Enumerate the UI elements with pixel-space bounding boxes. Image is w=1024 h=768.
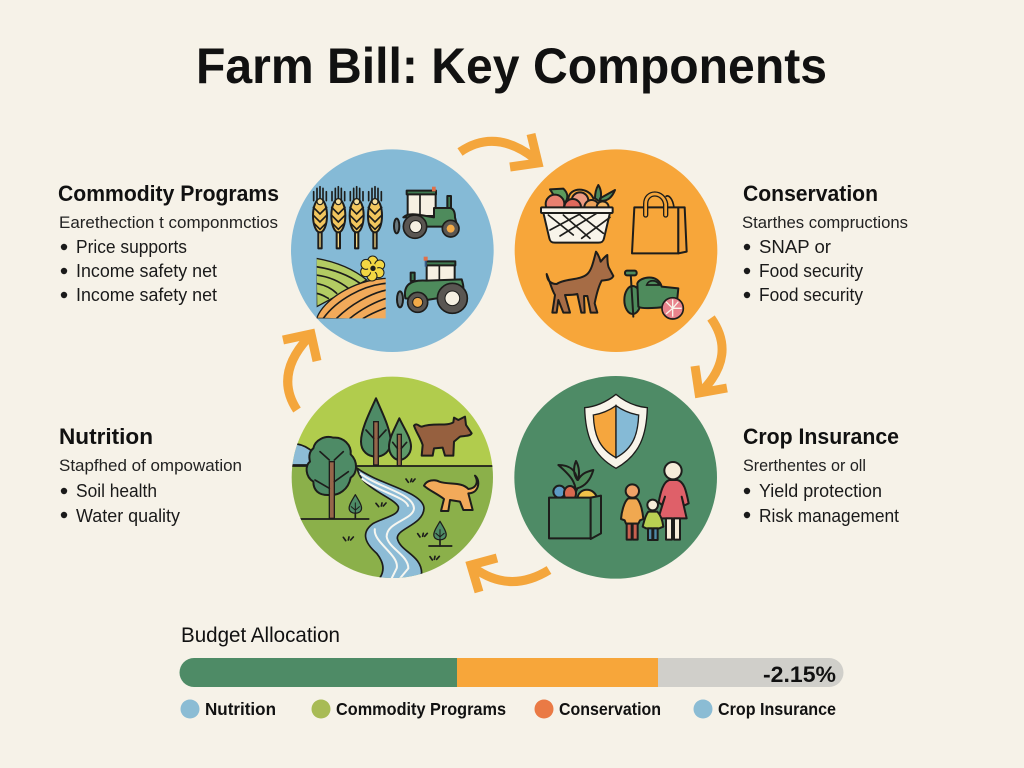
text block: conservation: Conservation [743, 181, 878, 206]
icon: green tractor bottom [397, 257, 467, 313]
arrow: top [460, 134, 538, 167]
text block: commodity programs: Income safety net [76, 261, 217, 281]
icon: family [621, 462, 689, 540]
text block: crop insurance: Crop Insurance [743, 424, 899, 449]
text block: nutrition: Soil health [76, 481, 157, 501]
text block: crop insurance: Yield protection [759, 481, 882, 501]
text block: commodity programs: Commodity Programs [58, 181, 279, 206]
icon: shield [585, 394, 647, 468]
arrow: bottom [471, 558, 549, 592]
icon: wheat stalks [313, 187, 382, 248]
bar value: -2.15% [763, 662, 836, 687]
legend item: commodity programs: Commodity Programs [336, 699, 506, 719]
legend item: crop insurance: Crop Insurance [718, 699, 836, 719]
text block: crop insurance: Srerthentes or oll [743, 457, 866, 475]
text block: crop insurance [743, 424, 899, 526]
panel: crop insurance circle [514, 376, 717, 579]
budget heading: Budget Allocation [181, 624, 340, 647]
text block: nutrition: Nutrition [59, 424, 153, 449]
landscape background [290, 375, 497, 579]
text block: commodity programs: Earethection t componmctios [59, 214, 278, 232]
text block: conservation: Food security [759, 261, 863, 281]
icon: grass tufts [343, 479, 439, 560]
icon: shopping bag [632, 194, 687, 253]
text block: conservation: SNAP or [759, 237, 831, 257]
legend item: nutrition: Nutrition [205, 699, 276, 719]
text block: conservation: Food security [759, 285, 863, 305]
text block: commodity programs: Income safety net [76, 285, 217, 305]
icon: green tricycle [624, 271, 683, 319]
panel: conservation circle [515, 149, 717, 352]
stacked budget bar [180, 658, 844, 687]
text block: crop insurance: Risk management [759, 506, 899, 526]
icon: brown bear [414, 417, 472, 456]
icon: grocery bag with plant [549, 461, 601, 539]
panel: commodity programs circle [291, 149, 494, 352]
title: Farm Bill: Key Components [196, 38, 827, 94]
icon: green tractor top [394, 187, 459, 238]
icon: river [357, 468, 424, 582]
text block: commodity programs [58, 181, 279, 305]
arrow: right [695, 318, 727, 393]
icon: pine trees [361, 398, 411, 466]
icon: small shrubs [349, 495, 446, 546]
text block: conservation: Starthes compructions [742, 214, 908, 232]
icon: deer [547, 252, 613, 313]
arrow: left [283, 334, 317, 410]
legend item: conservation: Conservation [559, 699, 661, 719]
text block: nutrition [59, 424, 242, 526]
text block: nutrition: Water quality [76, 506, 180, 526]
icon: fruit basket [541, 185, 615, 243]
legend [180, 699, 836, 719]
text block: conservation [742, 181, 908, 305]
icon: field with flower [316, 256, 387, 320]
panel: nutrition circle [290, 375, 497, 582]
icon: round tree [307, 437, 356, 518]
text block: commodity programs: Price supports [76, 237, 187, 257]
icon: orange dog [424, 476, 478, 511]
text block: nutrition: Stapfhed of ompowation [59, 457, 242, 475]
